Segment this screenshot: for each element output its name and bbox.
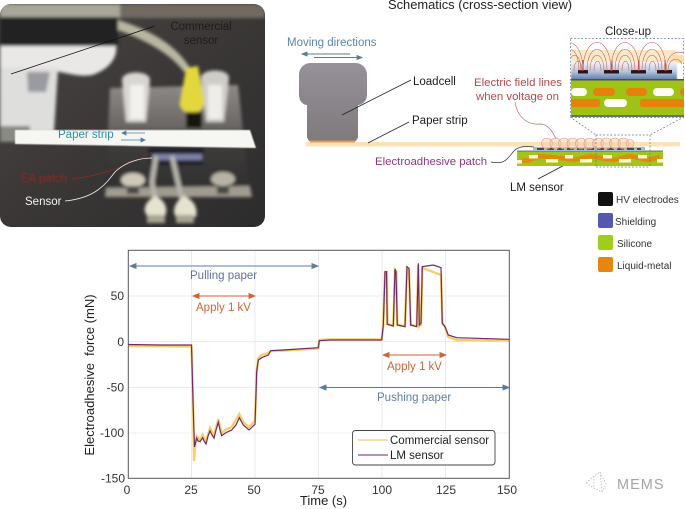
label: silicone: Silicone	[617, 239, 652, 250]
label: when voltage on: when voltage on	[475, 91, 559, 103]
y axis label: Electroadhesive force (mN)	[82, 294, 97, 456]
y axis tick labels: -50	[107, 380, 124, 394]
arrows: moving directions	[302, 52, 362, 60]
chart: electroadhesive force over time	[82, 250, 517, 508]
label: electric field lines: Electric field lines	[474, 77, 562, 89]
swatch: silicone	[598, 235, 613, 250]
x axis tick labels: 0	[124, 483, 131, 497]
label: commercial sensor second line: sensor	[184, 35, 218, 47]
legend text: commercial sensor: Commercial sensor	[390, 435, 489, 447]
y axis tick labels: 50	[111, 289, 124, 303]
sensor stack	[517, 138, 663, 166]
label: sensor: Sensor	[25, 196, 62, 208]
label: EA patch: EA patch	[21, 173, 67, 185]
swatch: shielding	[598, 213, 613, 228]
label: moving directions: Moving directions	[287, 37, 377, 49]
leader: LM sensor	[538, 160, 574, 179]
y axis tick labels: -100	[100, 426, 124, 440]
close-up diagram	[570, 38, 684, 118]
legend: materials	[598, 192, 679, 272]
label: LM sensor: LM sensor	[510, 182, 564, 194]
leader: paper strip	[368, 122, 409, 143]
label: shielding: Shielding	[615, 217, 656, 228]
label: paper strip: Paper strip	[58, 129, 114, 141]
label: apply 1 kV first: Apply 1 kV	[196, 302, 251, 314]
icon: chat network	[586, 472, 606, 492]
x axis tick labels: 125	[436, 483, 456, 497]
label: electroadhesive patch: Electroadhesive patch	[375, 156, 487, 168]
watermark text: MEMS	[617, 477, 664, 493]
close-up frame lines	[570, 117, 684, 167]
label: paper strip: Paper strip	[412, 115, 468, 127]
legend text: LM sensor: LM sensor	[390, 450, 444, 462]
legend key: LM sensor	[358, 454, 388, 456]
label: loadcell: Loadcell	[413, 76, 456, 88]
label: apply 1 kV second: Apply 1 kV	[387, 361, 442, 373]
arrow: apply 1 kV first	[193, 294, 255, 298]
swatch: HV electrodes	[598, 192, 613, 206]
arrows: paper strip direction	[121, 131, 145, 142]
arrow: pushing paper	[320, 385, 509, 390]
swatch: liquid-metal	[598, 257, 613, 272]
y axis tick labels: -150	[101, 472, 125, 486]
loadcell	[299, 63, 367, 142]
x axis tick labels: 150	[497, 483, 517, 497]
plot area grid	[128, 250, 509, 478]
x axis tick labels: 50	[247, 483, 261, 497]
y axis tick labels	[100, 289, 125, 486]
label: commercial sensor: Commercial	[170, 21, 232, 33]
leader: EA patch	[72, 152, 152, 179]
leader: electric field	[515, 102, 556, 139]
chart legend	[352, 430, 495, 465]
panel: device photo	[0, 4, 265, 227]
paper strip	[306, 142, 680, 146]
watermark: MEMS	[586, 472, 664, 493]
y axis tick labels: 0	[117, 335, 124, 349]
series: LM sensor	[128, 263, 509, 447]
label: HV electrodes: HV electrodes	[616, 195, 679, 206]
adhesive contact	[310, 140, 355, 142]
label: close-up: Close-up	[605, 26, 651, 38]
label: pulling paper: Pulling paper	[190, 270, 257, 282]
leader: commercial sensor	[11, 26, 155, 74]
leader: sensor	[65, 158, 152, 201]
x axis tick labels: 100	[372, 483, 392, 497]
x axis tick labels	[124, 483, 517, 497]
leader: electroadhesive patch	[491, 147, 534, 163]
x axis tick labels: 75	[311, 483, 325, 497]
leader: loadcell	[342, 80, 411, 115]
axes frame	[128, 250, 509, 478]
arrow: apply 1 kV second	[383, 352, 446, 358]
legend key: commercial sensor	[358, 439, 388, 441]
label: pushing paper: Pushing paper	[377, 392, 451, 404]
arrow: pulling paper	[130, 264, 318, 268]
label: liquid-metal: Liquid-metal	[617, 261, 671, 272]
panel: schematic	[287, 26, 685, 194]
series: commercial sensor	[128, 265, 509, 461]
x axis label: Time (s)	[300, 493, 347, 508]
x axis tick labels: 25	[184, 483, 198, 497]
